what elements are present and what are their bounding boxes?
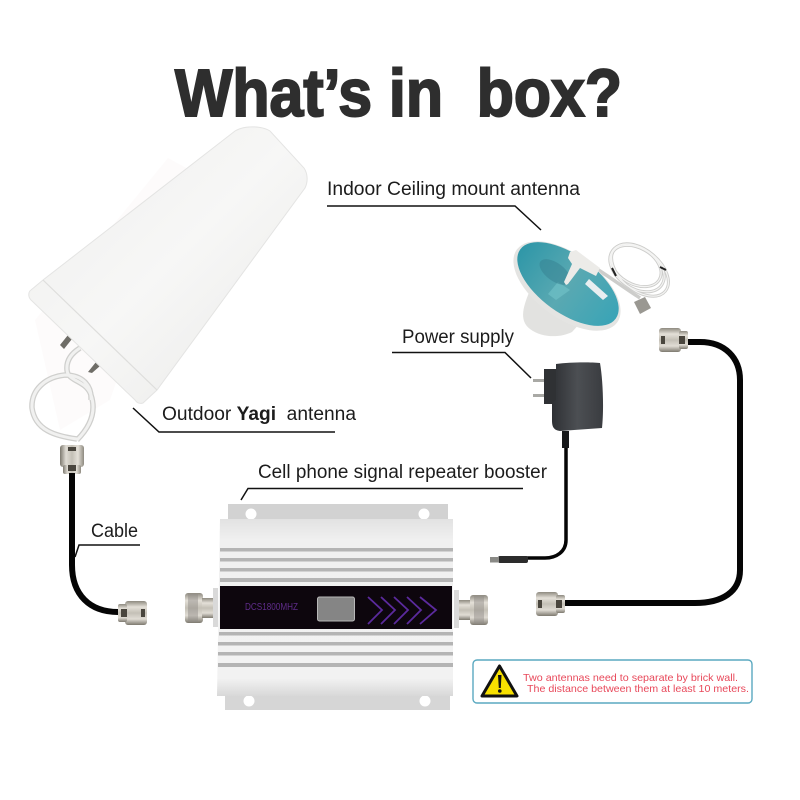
label: Cable: Cable <box>91 521 138 542</box>
aluminium body <box>217 519 453 696</box>
icon: indoor ceiling antenna <box>498 224 678 348</box>
label: Indoor Ceiling mount antenna: Indoor Ceiling mount antenna <box>327 179 580 200</box>
barrel plug <box>498 556 528 563</box>
white connector <box>564 250 600 285</box>
warning text <box>523 672 749 695</box>
purple arrows <box>368 597 436 624</box>
cable: right black cable <box>564 342 740 603</box>
icon: connector top right <box>659 328 688 352</box>
printed label <box>585 279 608 300</box>
prongs <box>533 379 546 382</box>
icon: cable connector top left <box>60 445 84 474</box>
label: Cell phone signal repeater booster <box>241 462 548 500</box>
label: Power supply <box>392 327 531 378</box>
mounting plate top <box>228 504 448 522</box>
disc rim <box>498 224 636 348</box>
mounting plate bottom <box>225 694 450 710</box>
model text: DCS1800MHZ <box>245 602 298 613</box>
label: Outdoor Yagi antenna: Outdoor Yagi antenna <box>162 404 356 425</box>
right N connector <box>454 590 488 628</box>
dome <box>523 290 592 336</box>
black front panel <box>220 586 452 629</box>
label: Power supply: Power supply <box>402 327 514 348</box>
white pigtail cable <box>32 348 93 440</box>
warning text: Two antennas need to separate by brick wall. <box>523 672 738 684</box>
adapter cable <box>526 448 566 558</box>
strain relief <box>562 431 569 448</box>
title: What’s in box? <box>175 56 622 131</box>
icon: outdoor Yagi antenna <box>29 127 307 440</box>
icon: power adapter <box>490 362 603 563</box>
prong block <box>544 369 558 404</box>
warning text: The distance between them at least 10 meters. <box>527 683 749 695</box>
teal disc <box>503 226 633 342</box>
label: Cell phone signal repeater booster: Cell phone signal repeater booster <box>258 462 548 483</box>
adapter body <box>552 362 603 431</box>
icon: warning triangle <box>482 666 517 696</box>
icon: connector bottom right <box>536 592 565 616</box>
lower ridges <box>218 632 453 667</box>
icon: signal booster <box>185 504 488 710</box>
display <box>318 597 354 621</box>
label: Indoor Ceiling mount antenna <box>327 179 580 230</box>
label: Cable <box>75 521 140 557</box>
icon: cable connector bottom left <box>118 601 147 625</box>
callout: warning box <box>473 660 752 703</box>
left N connector <box>185 588 218 627</box>
antenna radome <box>29 127 307 403</box>
antenna studs <box>60 335 72 349</box>
label: Outdoor Yagi antenna <box>133 404 356 432</box>
cable: left black cable <box>72 473 118 612</box>
cable coil <box>590 233 678 307</box>
upper ridges <box>220 548 453 582</box>
small connector <box>634 297 651 314</box>
